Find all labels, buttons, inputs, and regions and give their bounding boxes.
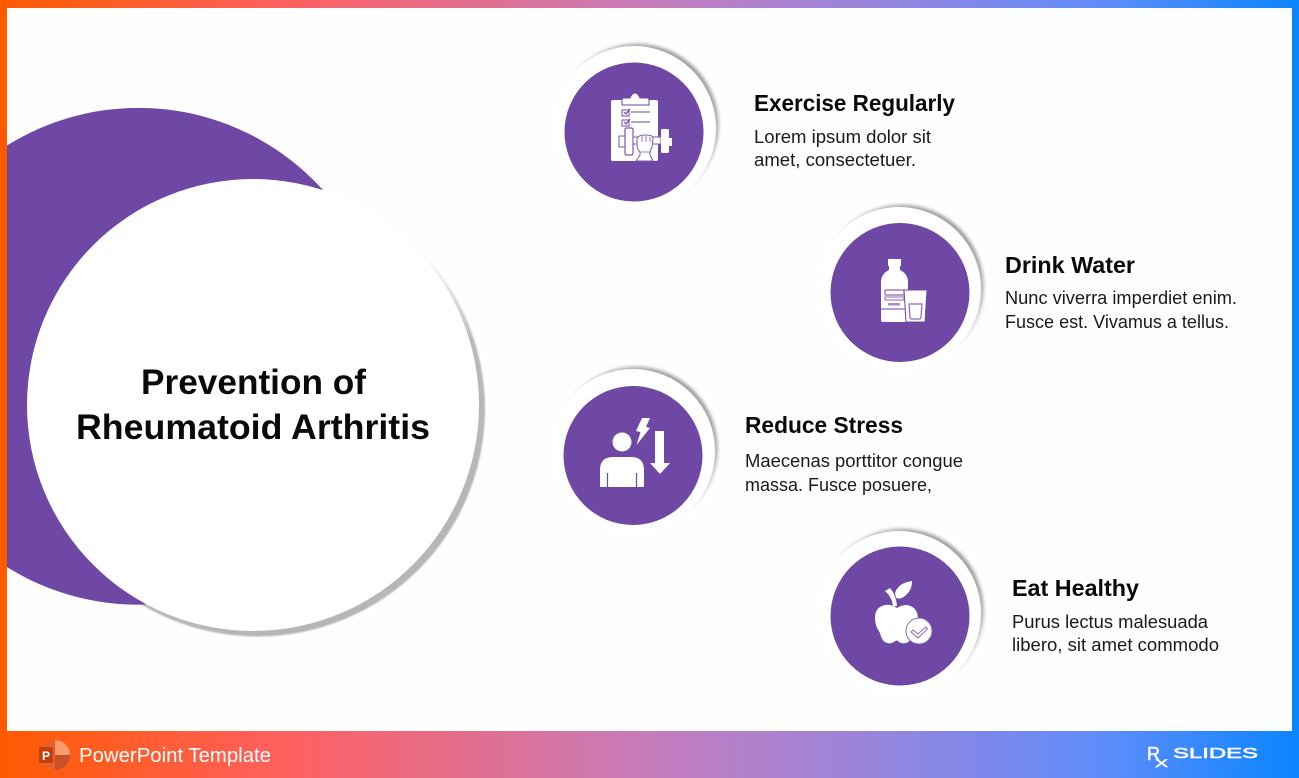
text: exercise regularly body: Lorem ipsum dolor sit (754, 127, 931, 147)
icon: person with stress arrow (600, 418, 670, 487)
text: drink water body: Nunc viverra imperdiet enim. (1005, 288, 1237, 308)
text: exercise regularly body: amet, consectetuer. (754, 150, 916, 170)
icon: PowerPoint logo: P (42, 749, 50, 763)
heading: reduce stress: Reduce Stress (745, 412, 903, 438)
text: eat healthy body: libero, sit amet commodo (1012, 635, 1219, 655)
icon: bottle and glass (881, 259, 927, 322)
logo: RX Slides: X (1155, 758, 1169, 770)
panel: reduce stress (551, 366, 718, 533)
purple disc (564, 62, 704, 202)
ring with shadow (817, 204, 984, 371)
title: Rheumatoid Arthritis (76, 408, 430, 447)
panel: exercise regularly (552, 44, 719, 210)
footer label: PowerPoint Template (79, 745, 271, 767)
logo: RX Slides (1147, 744, 1258, 770)
purple disc (564, 386, 702, 525)
text: reduce stress body: Maecenas porttitor congue (745, 451, 963, 471)
purple disc (830, 223, 970, 362)
heading: drink water: Drink Water (1005, 252, 1135, 278)
heading: eat healthy: Eat Healthy (1012, 575, 1139, 601)
text: drink water body: Fusce est. Vivamus a tellus. (1005, 312, 1229, 332)
icon: PowerPoint logo (39, 740, 70, 770)
icon: clipboard with dumbbell (611, 93, 672, 161)
panel: eat healthy (817, 528, 984, 695)
logo: RX Slides: SLIDES (1173, 745, 1258, 762)
icon: apple with check badge (875, 581, 932, 644)
white circle shadow (30, 182, 485, 636)
text: reduce stress body: massa. Fusce posuere, (745, 475, 932, 495)
purple disc (830, 546, 970, 686)
panel: drink water (817, 204, 984, 371)
text: eat healthy body: Purus lectus malesuada (1012, 612, 1209, 632)
logo: RX Slides: R (1147, 744, 1160, 764)
heading: exercise regularly: Exercise Regularly (754, 90, 955, 116)
purple crescent (0, 108, 322, 605)
ring with shadow (552, 44, 719, 210)
white circle (27, 179, 479, 631)
panel: central title circle (0, 108, 485, 636)
ring with shadow (551, 366, 718, 533)
title: Prevention of (141, 363, 366, 402)
ring with shadow (817, 528, 984, 695)
